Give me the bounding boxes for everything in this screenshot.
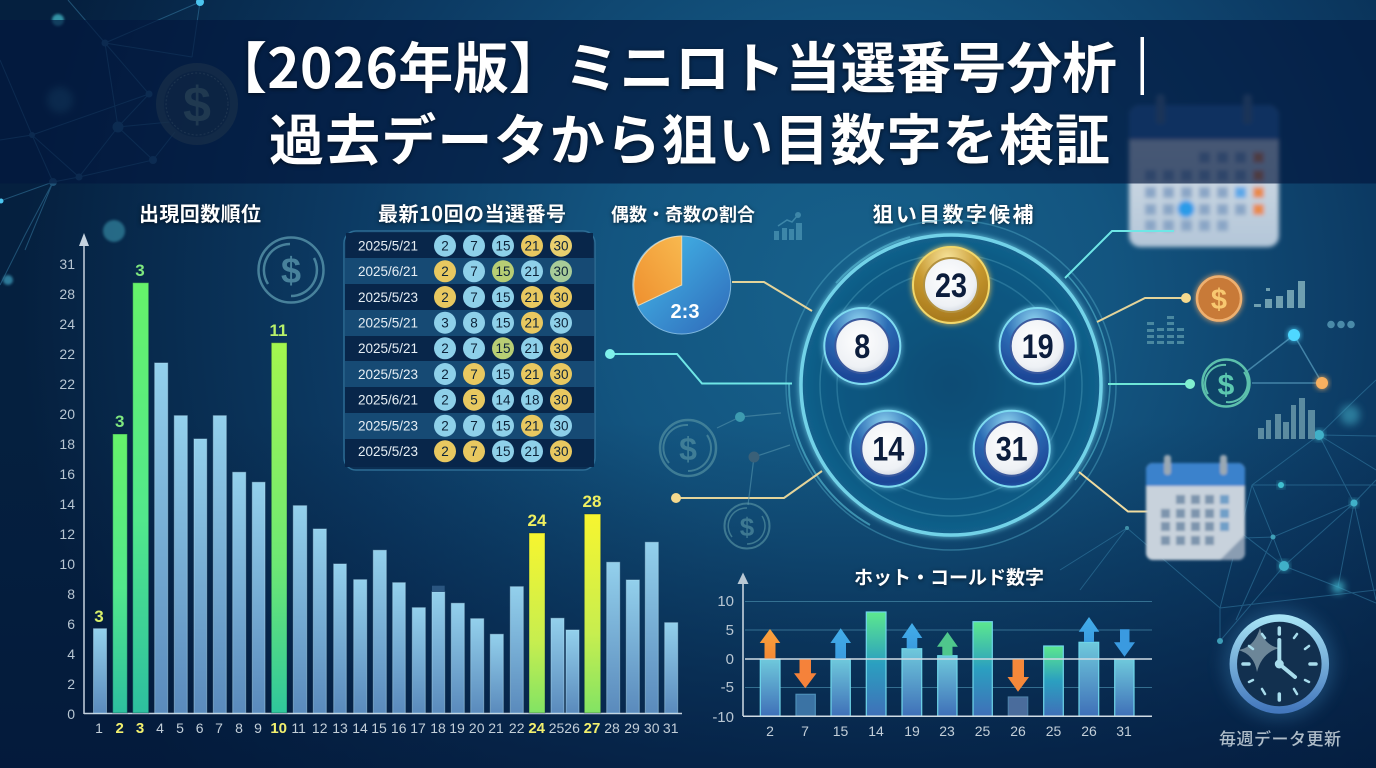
row 1: 15 <box>495 238 511 254</box>
connector and orange coin <box>1097 276 1241 322</box>
heading: frequency ranking: 出現回数順位 <box>139 198 261 227</box>
y axis labels: 22 <box>59 376 75 392</box>
x axis labels <box>95 720 679 737</box>
ball 23: 23 <box>935 267 967 305</box>
y axis labels: 6 <box>67 616 75 632</box>
row 5: 15 <box>495 341 511 356</box>
title <box>212 24 1144 176</box>
bar value labels: 3 <box>94 607 104 626</box>
row 6: 7 <box>470 367 478 382</box>
row 6: 15 <box>495 367 511 382</box>
x axis labels: 11 <box>291 720 306 736</box>
row 8 <box>358 415 572 437</box>
icon: small bars lower right <box>1258 398 1315 439</box>
icon: small bars right <box>1254 281 1305 308</box>
table: latest draws <box>344 231 595 470</box>
ball 14 <box>850 411 926 487</box>
ball 8 <box>824 308 900 384</box>
y axis labels: 22 <box>59 346 75 362</box>
y axis labels: 12 <box>59 526 75 542</box>
axes <box>738 572 1152 716</box>
y axis labels: 28 <box>59 286 75 302</box>
row 4: 8 <box>470 316 478 330</box>
bar chart: frequency ranking <box>59 233 682 737</box>
title: 過去データから狙い目数字を検証 <box>269 96 1110 176</box>
row 8: 7 <box>470 418 478 434</box>
x axis labels: 23 <box>939 723 955 739</box>
row 8: 30 <box>553 418 569 434</box>
ball 23 <box>913 247 989 323</box>
connector: pie to circle <box>732 282 812 311</box>
icon: small coin lower <box>724 504 770 548</box>
row 7: 30 <box>553 392 569 408</box>
row 8: 2025/5/23 <box>358 418 418 434</box>
row 8: 21 <box>524 418 540 434</box>
bar chart: hot and cold numbers <box>712 572 1152 739</box>
row 9: 2025/5/23 <box>358 444 418 459</box>
x axis labels: 20 <box>469 720 485 736</box>
x axis labels: 14 <box>352 720 368 736</box>
y axis labels: 0 <box>67 706 75 722</box>
row 6: 21 <box>524 367 540 382</box>
grid lines <box>745 602 1152 688</box>
connector: top right to calendar <box>1065 231 1174 278</box>
bar value labels: 3 <box>135 261 145 280</box>
pie chart: even odd ratio: 2:3 <box>671 301 699 323</box>
title: 【2026年版】ミニロト当選番号分析 <box>212 24 1117 104</box>
row 3: 2025/5/23 <box>358 290 418 305</box>
icon: coin beside chart: $ <box>281 250 301 291</box>
bar value labels: 24 <box>528 511 547 530</box>
row 2: 7 <box>470 264 478 279</box>
row 9: 30 <box>553 444 569 459</box>
row 2: 2 <box>441 264 449 279</box>
connector: lower right to calendar <box>1079 472 1174 512</box>
y axis labels: -10 <box>712 709 734 726</box>
row 3: 7 <box>470 290 478 305</box>
connector and teal coin <box>1108 329 1328 406</box>
y axis labels: 18 <box>59 436 75 452</box>
heading: target numbers: 狙い目数字候補 <box>872 199 1034 229</box>
arrow up blue: 15 <box>830 628 851 658</box>
x axis labels: 16 <box>391 720 407 736</box>
row 3: 15 <box>495 290 511 305</box>
x axis labels: 7 <box>801 723 809 739</box>
bar value labels: 3 <box>115 412 124 431</box>
row 9: 7 <box>470 444 478 459</box>
ball 19: 19 <box>1022 328 1054 366</box>
background network: bottom right <box>1060 380 1376 641</box>
x axis labels: 24 <box>528 720 546 737</box>
row 7: 14 <box>495 392 511 408</box>
x axis labels: 15 <box>371 720 387 736</box>
background glow dots <box>0 0 204 285</box>
y axis labels: 0 <box>726 651 734 668</box>
y axis labels: 5 <box>726 622 734 639</box>
y axis <box>79 233 682 714</box>
row 1: 30 <box>553 238 569 254</box>
y axis labels: 24 <box>59 316 75 332</box>
row 8: 2 <box>441 418 449 434</box>
bars: regular <box>94 363 678 713</box>
row 9 <box>358 440 572 462</box>
x axis labels: 25 <box>975 723 990 739</box>
row 7: 2 <box>441 392 449 408</box>
row 1: 2025/5/21 <box>358 238 418 254</box>
x axis labels <box>766 723 1132 739</box>
y axis labels: 10 <box>59 556 75 572</box>
y axis labels: 4 <box>67 646 75 662</box>
row 3: 21 <box>524 290 540 305</box>
y axis labels: 2 <box>67 676 75 692</box>
row 9: 21 <box>524 444 540 459</box>
background network: top left <box>0 0 200 285</box>
arrow down blue: 31 <box>1114 629 1135 657</box>
x axis labels: 31 <box>663 720 679 736</box>
icon: small coin left <box>660 420 716 476</box>
y axis labels <box>59 256 75 722</box>
x axis labels: 1 <box>95 720 103 736</box>
title band <box>0 20 1376 184</box>
y axis labels: 31 <box>59 256 75 272</box>
arrow down orange: 7 <box>794 660 816 688</box>
x axis labels: 25 <box>1046 723 1061 739</box>
row 7: 18 <box>524 392 540 408</box>
row 3: 2 <box>441 290 449 305</box>
icon: clock <box>1223 608 1335 720</box>
pie chart: even odd ratio <box>633 236 731 334</box>
x axis labels: 18 <box>430 720 446 736</box>
y axis labels: 10 <box>717 593 734 610</box>
x axis labels: 27 <box>584 720 600 737</box>
row 2 <box>358 260 572 282</box>
icon: calendar lower right <box>1146 455 1245 560</box>
icon: small coin lower: $ <box>740 512 755 542</box>
connector: yellow lower left <box>671 471 822 503</box>
x axis labels: 14 <box>868 723 884 739</box>
y axis labels: 20 <box>59 406 75 422</box>
x axis labels: 21 <box>488 720 504 736</box>
connector: cyan left <box>605 349 792 384</box>
row 2: 21 <box>524 264 540 279</box>
x axis labels: 2 <box>116 720 124 737</box>
x axis labels: 19 <box>904 723 920 739</box>
row 6: 30 <box>553 367 569 382</box>
icon: equalizer <box>1147 316 1184 344</box>
row 7 <box>358 389 572 411</box>
row 7: 5 <box>470 392 478 408</box>
y axis labels: 8 <box>67 586 75 602</box>
heading: latest 10 draws: 最新10回の当選番号 <box>378 198 566 227</box>
bar value labels: 28 <box>583 492 601 511</box>
x axis labels: 30 <box>644 720 660 736</box>
row 3 <box>358 286 572 308</box>
heading: hot cold: ホット・コールド数字 <box>854 563 1044 590</box>
x axis labels: 10 <box>270 720 287 737</box>
x axis labels: 7 <box>215 720 223 736</box>
icon: connector nodes near coin <box>717 412 790 505</box>
ball 19 <box>1000 308 1076 384</box>
x axis labels: 5 <box>176 720 184 736</box>
row 3: 30 <box>553 290 569 305</box>
x axis labels: 6 <box>196 720 204 736</box>
row 4: 21 <box>524 316 540 330</box>
row 4 <box>358 312 572 334</box>
x axis labels: 15 <box>833 723 848 739</box>
x axis labels: 29 <box>624 720 640 736</box>
icon: blurred calendar top right <box>1129 94 1279 247</box>
x axis labels: 9 <box>254 720 262 736</box>
row 8: 15 <box>495 418 511 434</box>
row 1: 21 <box>524 238 540 254</box>
row 4: 30 <box>553 316 569 330</box>
row 4: 15 <box>495 316 511 330</box>
row 5: 2 <box>441 341 449 356</box>
icon: small chart <box>774 212 802 240</box>
row 7: 2025/6/21 <box>358 392 418 408</box>
row 2: 30 <box>553 264 569 279</box>
row 6: 2025/5/23 <box>358 367 418 382</box>
icon: dim coin top left <box>160 67 234 141</box>
row 4: 2025/5/21 <box>358 316 418 330</box>
arrow down orange: 26 <box>1008 660 1029 692</box>
ball 31 <box>974 411 1050 487</box>
x axis labels: 13 <box>332 720 348 736</box>
x axis labels: 31 <box>1116 723 1132 739</box>
x axis labels: 4 <box>156 720 164 736</box>
x axis labels: 17 <box>410 720 426 736</box>
row 5: 30 <box>553 341 569 356</box>
arrow up green: 23 <box>937 632 958 656</box>
row 4: 3 <box>441 316 449 330</box>
heading: even odd ratio: 偶数・奇数の割合 <box>611 201 755 227</box>
caption: weekly update: 毎週データ更新 <box>1219 725 1341 750</box>
x axis labels: 26 <box>1010 723 1026 739</box>
bars <box>760 612 1134 716</box>
row 1 <box>358 235 572 257</box>
row 5 <box>358 337 572 359</box>
arrow up blue: 26 <box>1079 617 1099 642</box>
ball 14: 14 <box>872 431 904 469</box>
x axis labels: 28 <box>604 720 620 736</box>
x axis labels: 19 <box>449 720 465 736</box>
arrow up orange: 2 <box>760 629 780 658</box>
connector and orange coin: $ <box>1211 284 1227 316</box>
y axis labels: -5 <box>721 679 734 696</box>
row 5: 2025/5/21 <box>358 341 418 356</box>
row 2: 2025/6/21 <box>358 264 418 279</box>
row 9: 2 <box>441 444 449 459</box>
x axis labels: 3 <box>136 720 144 737</box>
icon: coin beside chart <box>258 238 324 302</box>
row 6 <box>358 363 572 385</box>
icon: dim coin top left: $ <box>183 77 211 133</box>
y axis labels: 14 <box>59 496 75 512</box>
bar value labels: 11 <box>270 321 287 340</box>
row 2: 15 <box>495 264 511 279</box>
x axis labels: 8 <box>235 720 243 736</box>
highlighted bars green and yellow <box>113 283 601 713</box>
bar value labels <box>94 261 601 626</box>
icon: three dots <box>1327 321 1355 328</box>
row 1: 7 <box>470 238 478 254</box>
icon: small coin left: $ <box>679 431 697 467</box>
circle panel: target numbers <box>786 220 1116 550</box>
x axis labels: 22 <box>509 720 525 736</box>
row 5: 21 <box>524 341 540 356</box>
ball 31: 31 <box>996 431 1028 469</box>
background network glow nodes <box>1125 405 1360 644</box>
row 5: 7 <box>470 341 478 356</box>
row 9: 15 <box>495 444 511 459</box>
y axis labels: 16 <box>59 466 75 482</box>
x axis labels: 26 <box>1081 723 1097 739</box>
y axis labels <box>712 593 734 726</box>
connector and teal coin: $ <box>1218 369 1235 402</box>
ball 8: 8 <box>854 328 870 366</box>
row 6: 2 <box>441 367 449 382</box>
x axis labels: 2526 <box>549 720 580 736</box>
x axis labels: 2 <box>766 723 774 739</box>
x axis labels: 12 <box>312 720 328 736</box>
row 1: 2 <box>441 238 449 254</box>
arrow up blue: 19 <box>902 623 922 648</box>
bar 18 dark cap <box>432 586 445 592</box>
